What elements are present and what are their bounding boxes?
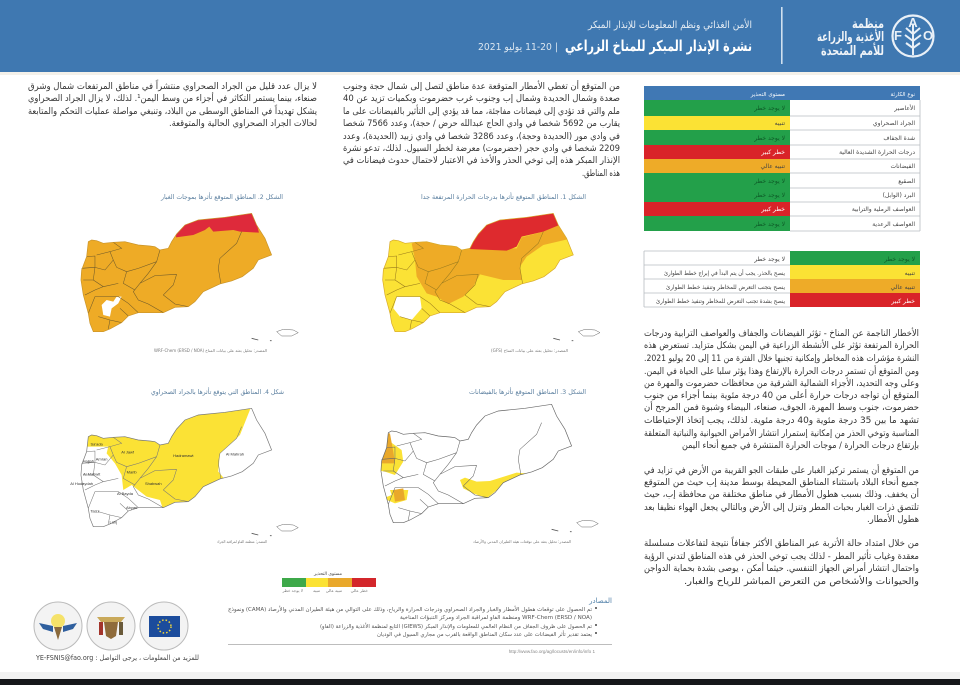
map labels: Al Bayda (117, 491, 134, 496)
warning levels: لا يوجد خطر (753, 221, 785, 228)
text block: climate hazards overview: المناسبة وتوخي الحذر من إمكانية إستمرار انتشار الأمراض الحيوانية والنباتية المتعلقة (644, 427, 919, 439)
map labels: Amran (96, 456, 108, 461)
table header labels: نوع الكارثة (891, 91, 915, 98)
figure 3 source note: المصدر: تحليل بعثة على توقعات هيئة الطيران المدني والأرصاد (473, 539, 571, 544)
map labels: Al Jawf (121, 450, 135, 455)
hazard names: العواصف الرعدية (872, 221, 915, 228)
contact line: للمزيد من المعلومات ، يرجى التواصل : YE-FSNIS@fao.org (35, 654, 199, 662)
map labels: Abyan (126, 505, 137, 510)
table header labels: مستوى التحذير (750, 92, 785, 98)
text block: desert locust: لا يزال عدد قليل من الجراد الصحراوي منتشراً في مناطق المرتفعات شمال وشرق (28, 79, 317, 92)
footnote link: http://www.fao.org/ag/locusts/en/info/info 1 (509, 649, 595, 654)
text block: dust and health: والحيوانات والأشخاص من التعرض المباشر للرياح والغبار. (684, 575, 919, 587)
organisation name: الأغذية والزراعة (817, 28, 884, 45)
figure 2 caption: الشكل 2. المناطق المتوقع تأثرها بموجات الغبار (160, 192, 283, 201)
warning levels: لا يوجد خطر (753, 135, 785, 142)
legend labels: لا يوجد خطر (281, 588, 303, 593)
hazard names: العواصف الرملية والترابية (852, 206, 915, 213)
sources list: WRF-Chem (ERSD / NOA) ومنظمة الفاو لمراقبة الجراد ومركز التنبؤات المناخية (400, 614, 592, 621)
warning levels: تنبيه عالي (761, 163, 785, 170)
map labels: Taizz (90, 508, 100, 513)
key levels: تنبيه عالي (891, 284, 915, 291)
warning key table (644, 251, 920, 307)
text block: desert locust (28, 79, 317, 129)
hazard names: الأعاصير (893, 104, 915, 112)
organisation name: للأمم المتحدة (821, 42, 884, 59)
icon: FAO logo: A (908, 15, 918, 30)
text block: rainfall and floods: في وادي مور (الحديدة وحجة)، وعدد 3286 شخصا في وادي زبيد (الحديدة)، وعدد (343, 132, 620, 142)
map labels: Lahj (110, 519, 117, 524)
text block: dust: تلتصق ذرات الغبار بحبات المطر وتنزل إلى الأرض وبالتالي يجعل الهواء نظيفا بعد (644, 501, 919, 513)
icon: FAO logo (892, 15, 934, 56)
map labels: Marib (127, 470, 137, 475)
text block: dust and health: واحتمال انتشار أمراض الجهاز التنفسي. حيثما أمكن ، يوصى بشدة بحماية الدواجن (644, 562, 919, 574)
header band (0, 0, 960, 75)
key descriptions: ينصح بالحذر. يجب أن يتم البدأ في إبراج خطط الطوارئ (664, 269, 785, 277)
text block: climate hazards overview: بإرتفاع درجات الحرارة / موجات الحرارة المنتشرة في جميع أنحاء اليمن (682, 439, 919, 451)
sources heading: المصادر (588, 597, 612, 605)
map labels (70, 442, 244, 524)
text block: rainfall and floods: 2209 شخصا في وادي حجر (حضرموت) معرضة لخطر السيول. لذلك، تدعو نشرة (343, 144, 620, 154)
warning levels: لا يوجد خطر (753, 105, 785, 112)
header title: نشرة الإنذار المبكر للمناخ الزراعي (565, 37, 752, 55)
text block: climate hazards overview: ومن المتوقع أن تستمر درجات الحرارة بالإرتفاع وهذا يؤثر سلبا على الحياة في اليمن. (644, 365, 919, 377)
organisation name (817, 17, 884, 59)
key descriptions: لا يوجد خطر (753, 256, 785, 263)
warning levels: خطر كبير (760, 149, 785, 156)
hazard names: البرد (الوابل) (883, 192, 915, 199)
key descriptions: ينصح بشدة تجنب التعرض للمخاطر وتنفيذ خطط الطوارئ (656, 298, 785, 305)
figure 4: desert locust map (70, 387, 298, 544)
text block: rainfall and floods: صعدة وشمال الحديدة وشمال إب وجنوب غرب حضرموت وبكميات تزيد عن 40 (343, 94, 620, 104)
bottom edge (0, 672, 960, 685)
text block: climate hazards overview: الأخطار الناجمة عن المناخ - تؤثر الفيضانات والجفاف والعواصف الترابية ودرجات (644, 327, 919, 339)
text block: climate hazards overview: وعلى وجه التحديد، الأجزاء الشمالية الشرقية من محافظات حضرموت والمهرة من (644, 377, 919, 389)
warning levels: خطر كبير (760, 206, 785, 213)
text block: rainfall and floods: هذه المناطق. (582, 169, 620, 179)
text block: rainfall and floods: يقارب من 5692 شخصا في وادي الحاج عبدالله حرض / حجة)، وعدد 7566 شخصا (343, 119, 620, 129)
sources list (228, 605, 597, 638)
map labels: Al Mahrah (226, 452, 244, 457)
text block: climate hazards overview: المتوقع أن تواجه درجات حرارة أعلى من 40 درجة مئوية بينما أجزاء من جنوب (644, 389, 919, 401)
table header labels (750, 91, 915, 98)
key levels (883, 256, 915, 305)
figure 3 caption: الشكل 3. المناطق المتوقع تأثرها بالفيضانات (469, 387, 586, 396)
text block: dust (644, 464, 919, 525)
hazard names: الفيضانات (890, 163, 915, 170)
header date: | 11-20 يوليو 2021 (478, 42, 558, 53)
text block: dust and health (644, 536, 919, 587)
hazard names (839, 104, 915, 228)
text block: climate hazards overview: الحرارة المرتفعة تؤثر على الأنشطة الزراعية في اليمن بشكل متزايد. تستعرض هذه (644, 339, 919, 351)
map labels: Sa'ada (90, 442, 104, 447)
text block: desert locust: صنعاء، بينما يستمر التكاثر في أجزاء من وسط اليمن¹. لذلك، لا يزال الجراد الصحراوي (28, 92, 317, 104)
figure 4 source note: المصدر: منظمة الفاو لمراقبة الجراد (217, 539, 267, 544)
figure 2: dust storm map (81, 192, 298, 353)
figure 1 source note: المصدر: تحليل بعثة على بيانات المناخ (GFS) (491, 348, 568, 353)
figure 2 source note: المصدر: تحليل بعثة على بيانات المناخ (WRF-Chem (ERSD / NOA (154, 348, 267, 353)
warning levels: تنبيه (775, 120, 785, 127)
legend labels (281, 588, 369, 593)
key descriptions (656, 256, 785, 305)
icon: FAO logo: F (894, 28, 902, 43)
warning levels: لا يوجد خطر (753, 192, 785, 199)
text block: dust: جميع أنحاء البلاد باستثناء المناطق المحيطة بوسط مدينة إب حيث من المتوقع (644, 476, 919, 488)
warning levels: لا يوجد خطر (753, 178, 785, 185)
text block: dust: هطول الأمطار. (867, 513, 919, 525)
icon: FAO logo: O (923, 28, 933, 43)
logo: Yemen emblem (87, 602, 135, 650)
hazard names: الصقيع (898, 178, 915, 185)
hazard names: الجراد الصحراوي (873, 120, 915, 127)
text block: rainfall and floods: ملم والتي قد تؤدي إلى فيضانات مفاجئة، مما قد يؤدي إلى التأثير بالفيضانات على ما (343, 104, 620, 117)
text block: dust: من المتوقع أن يستمر تركيز الغبار على طبقات الجو القريبة من الأرض في تزايد في (644, 464, 919, 476)
hazard names: شدة الجفاف (883, 135, 915, 142)
text block: desert locust: لحالات الجراد الصحراوي الحالية والمتوقعة. (169, 119, 317, 129)
key descriptions: ينصح بتجنب التعرض للمخاطر وتنفيذ خطط الطوارئ (666, 284, 785, 291)
map labels: Al Hudaydah (70, 481, 93, 486)
text block: rainfall and floods: من المتوقع أن تغطي الأمطار المتوقعة عدة مناطق لتصل إلى شمال حجة وجنوب (343, 80, 620, 92)
map legend (281, 572, 376, 593)
hazard names: درجات الحرارة الشديدة العالية (839, 149, 915, 156)
text block: climate hazards overview: تشهد ما بين 35 درجة مئوية و40 درجة مئوية. لذلك، يجب إتخاذ الإحتياطات (644, 416, 919, 426)
key levels: خطر كبير (890, 298, 915, 305)
sources (228, 597, 612, 654)
figure 3: flood map (375, 387, 598, 544)
map labels: Shabwah (145, 481, 162, 486)
header subtitle: الأمن الغذائي ونظم المعلومات للإنذار المبكر (587, 18, 752, 31)
text block: climate hazards overview: حضرموت، جنوب وسط المهرة، الجوف، صنعاء، البيضاء وشبوة فمن المرجح أن (644, 401, 919, 413)
legend labels: تنبيه (313, 588, 320, 593)
text block: rainfall and floods (343, 80, 620, 179)
logo: aviation and meteorology authority (34, 602, 82, 650)
figure 1: extreme temperature map (383, 192, 600, 353)
text block: dust and health: معقدة وغياب تأثير المطر - لذلك يجب توخي الحذر في هذه المناطق لتدني الرؤية (644, 549, 919, 562)
sources list: يعتمد تقدير تأثر الفيضانات على عدد سكان المناطق الواقعة بالقرب من مجاري السيول في الوديان (377, 630, 592, 638)
warning levels (753, 105, 785, 228)
text block: climate hazards overview (644, 327, 919, 451)
legend labels: تنبيه عالي (326, 588, 342, 593)
sources list: تم الحصول على ظروف الجفاف من النظام العالمي للمعلومات والإنذار المبكر (GIEWS) التابع لمنظمة الأغذية والزراعة (الفاو) (320, 622, 592, 630)
organisation name: منظمة (852, 17, 884, 32)
figure 1 caption: الشكل 1. المناطق المتوقع تأثرها بدرجات الحرارة المرتفعة جدا (421, 192, 586, 201)
map labels: Hadramawt (173, 453, 194, 458)
legend labels: خطر عالي (351, 588, 369, 593)
sources list: تم الحصول على توقعات هطول الأمطار والغبار والجراد الصحراوي ودرجات الحرارة والرياح، وذلك على التوالي من هيئة الطيران المدني والأرصاد (CAMA) ونموذج (228, 605, 592, 613)
text block: dust and health: من خلال امتداد حالة الأتربة عبر المناطق الأكثر جفافاً نتيجة لتفاعلات مسلسلة (644, 536, 919, 549)
text block: desert locust: يشكل تهديداً في المناطق الوسطى من البلاد، وتنبغي مواصلة عمليات التحكم والمتابعة (28, 104, 317, 117)
map labels: Hajjah (83, 458, 94, 463)
logo: European Union (140, 602, 188, 650)
text block: rainfall and floods: الإنذار المبكر هذه إلى توخي الحذر والأخذ في الاعتبار لاحتمال حدوث فيضانات في (343, 154, 620, 166)
key levels: تنبيه (905, 270, 915, 277)
key levels: لا يوجد خطر (883, 256, 915, 263)
figure 4 caption: شكل 4. المناطق التي يتوقع تأثرها بالجراد الصحراوي (151, 387, 284, 396)
hazard table (644, 86, 920, 231)
text block: dust: أن يخفف. وذلك بسبب هطول الأمطار في مناطق مختلفة من محافظة إب، حيث (644, 488, 919, 500)
map legend: مستوى التحذير (313, 572, 343, 577)
map labels: Al Mahwit (83, 472, 101, 477)
text block: climate hazards overview: النشرة مؤشرات هذه المخاطر وإمكانية تجنبها خلال الفترة من 11 إلى 20 يوليو 2021. (644, 354, 919, 364)
